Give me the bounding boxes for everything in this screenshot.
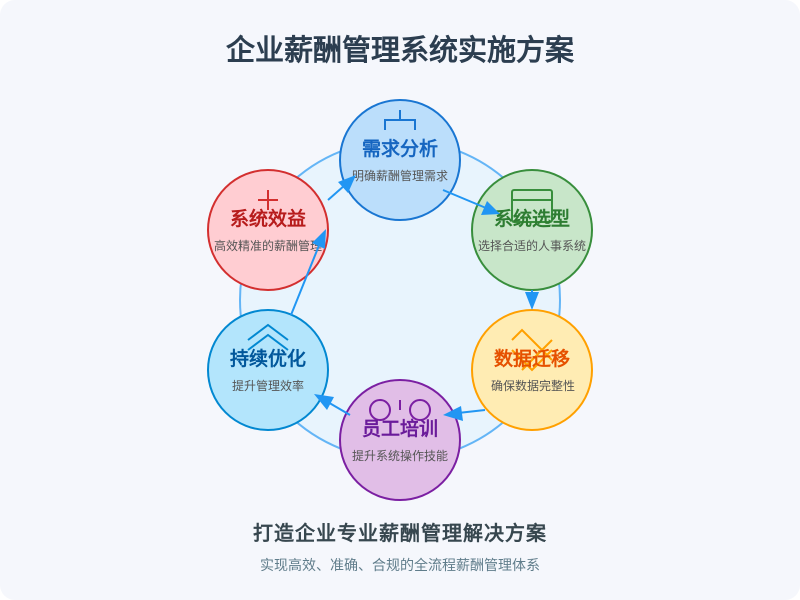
panel: 数据迁移 [472, 310, 592, 430]
arrow: 需求分析 to 系统选型 [443, 190, 500, 215]
icon: plus [258, 190, 278, 210]
arrow: 系统效益 to 需求分析 [328, 175, 356, 200]
text: 明确薪酬管理需求: 明确薪酬管理需求 [352, 168, 448, 183]
icon: org bracket [385, 110, 415, 130]
heading: 员工培训: 员工培训 [362, 417, 438, 440]
panel: 系统效益 [208, 170, 328, 290]
title: 企业薪酬管理系统实施方案 [226, 33, 575, 67]
text: 选择合适的人事系统: 选择合适的人事系统 [478, 238, 586, 253]
arrow: 员工培训 to 持续优化 [314, 394, 350, 415]
icon: double chevron [248, 325, 288, 350]
heading: 持续优化: 持续优化 [230, 347, 306, 370]
text: 提升管理效率: 提升管理效率 [232, 378, 304, 393]
text: 提升系统操作技能: 提升系统操作技能 [352, 448, 448, 463]
panel: 需求分析 [340, 100, 460, 220]
icon: two people [370, 400, 430, 420]
heading: 系统效益: 系统效益 [230, 207, 306, 230]
panel: 系统选型 [472, 170, 592, 290]
arrow: 持续优化 to 系统效益 [291, 229, 326, 315]
icon: window [512, 190, 552, 222]
arrow: 数据迁移 to 员工培训 [443, 406, 485, 421]
text: 确保数据完整性: 确保数据完整性 [491, 378, 575, 393]
text: 高效精准的薪酬管理: 高效精准的薪酬管理 [214, 238, 322, 253]
panel: 持续优化 [208, 310, 328, 430]
arrow: 系统选型 to 数据迁移 [525, 290, 539, 310]
subtitle: 打造企业专业薪酬管理解决方案 [253, 521, 547, 545]
heading: 数据迁移: 数据迁移 [494, 347, 570, 370]
heading: 需求分析: 需求分析 [362, 137, 438, 160]
heading: 系统选型: 系统选型 [494, 207, 570, 230]
footer note: 实现高效、准确、合规的全流程薪酬管理体系 [260, 557, 540, 573]
background ring [240, 140, 560, 460]
icon: crossing arrows [512, 330, 552, 370]
panel: 员工培训 [340, 380, 460, 500]
